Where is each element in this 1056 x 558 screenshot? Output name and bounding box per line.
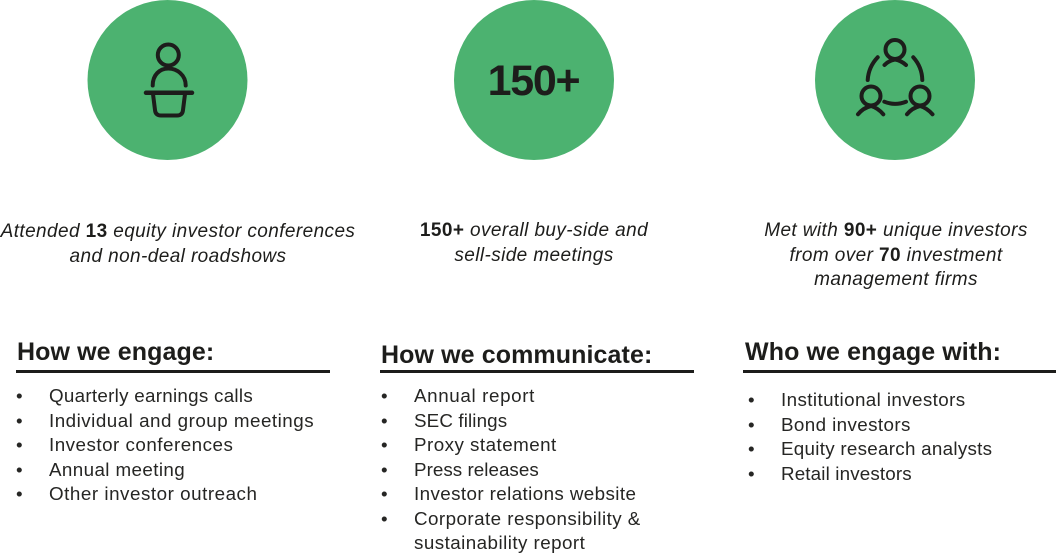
list: engagement methods: • bbox=[16, 483, 23, 504]
list: engagement methods: Other investor outreach bbox=[49, 483, 257, 504]
list: audiences: Bond investors bbox=[781, 414, 911, 434]
list: communication channels: • bbox=[381, 483, 388, 504]
list: engagement methods: Individual and group meetings bbox=[49, 410, 314, 430]
list: communication channels: • bbox=[381, 508, 388, 528]
list: audiences: • bbox=[748, 389, 755, 410]
list: engagement methods: • bbox=[16, 434, 23, 455]
text: conferences stat: Attended 13 equity investor conferences bbox=[1, 221, 355, 242]
heading: How we engage: How we engage: bbox=[17, 338, 214, 366]
text: conferences stat: and non-deal roadshows bbox=[70, 246, 286, 267]
list: audiences bbox=[748, 389, 992, 484]
list: engagement methods: • bbox=[16, 458, 23, 480]
text: unique investors stat bbox=[764, 220, 1028, 290]
text: unique investors stat: from over 70 investment bbox=[789, 245, 1003, 266]
list: engagement methods: Investor conferences bbox=[49, 434, 233, 455]
stat circle: 150+ bbox=[454, 0, 614, 160]
list: communication channels: Proxy statement bbox=[414, 434, 557, 455]
list: communication channels: • bbox=[381, 458, 388, 480]
list: communication channels: • bbox=[381, 410, 388, 430]
icon: three connected people bbox=[815, 0, 975, 160]
list: engagement methods bbox=[16, 385, 314, 504]
stat circle: 150+: 150+ bbox=[488, 57, 579, 105]
list: audiences: • bbox=[748, 438, 755, 459]
list: engagement methods: • bbox=[16, 385, 23, 406]
list: communication channels: Investor relations website bbox=[414, 483, 636, 504]
list: communication channels: sustainability report bbox=[414, 532, 585, 553]
list: audiences: Equity research analysts bbox=[781, 438, 992, 459]
text: meetings stat: sell-side meetings bbox=[454, 245, 614, 266]
list: engagement methods: • bbox=[16, 410, 23, 430]
list: engagement methods: Annual meeting bbox=[49, 458, 185, 480]
list: audiences: Retail investors bbox=[781, 462, 912, 484]
text: unique investors stat: Met with 90+ unique investors bbox=[764, 220, 1028, 241]
heading: Who we engage with: Who we engage with: bbox=[745, 338, 1001, 366]
list: communication channels: Corporate responsibility & bbox=[414, 508, 641, 528]
text: conferences stat bbox=[0, 221, 355, 267]
text: meetings stat bbox=[420, 220, 648, 266]
text: unique investors stat: management firms bbox=[814, 269, 978, 290]
list: audiences: • bbox=[748, 414, 755, 434]
icon: person at podium bbox=[88, 0, 248, 160]
list: communication channels: • bbox=[381, 434, 388, 455]
list: communication channels: Press releases bbox=[414, 458, 539, 480]
list: audiences: • bbox=[748, 462, 755, 484]
list: communication channels: • bbox=[381, 385, 388, 406]
heading: How we communicate: How we communicate: bbox=[381, 341, 652, 369]
list: communication channels bbox=[381, 385, 641, 553]
list: communication channels: SEC filings bbox=[414, 410, 507, 430]
list: engagement methods: Quarterly earnings calls bbox=[49, 385, 253, 406]
list: communication channels: Annual report bbox=[414, 385, 535, 406]
text: meetings stat: 150+ overall buy-side and bbox=[420, 220, 648, 241]
list: audiences: Institutional investors bbox=[781, 389, 966, 410]
